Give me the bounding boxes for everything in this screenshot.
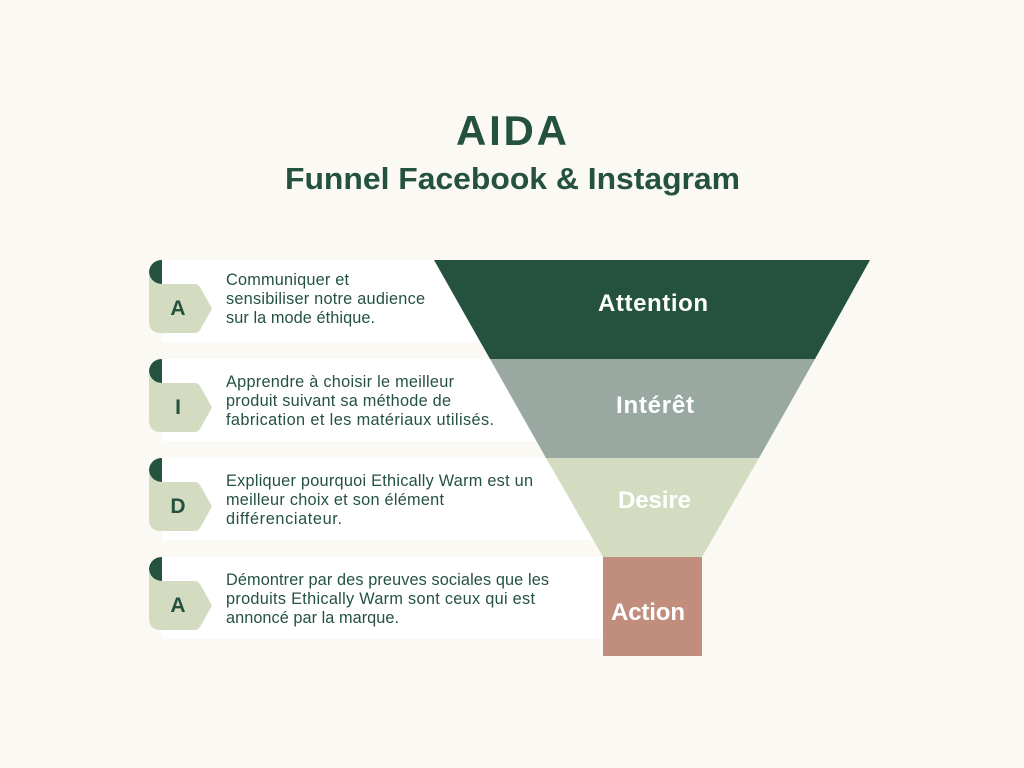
text: attention description: Communiquer et	[226, 271, 349, 289]
text: interest description: Apprendre à choisir le meilleur	[226, 373, 455, 391]
text: interest description: fabrication et les matériaux utilisés.	[226, 411, 494, 429]
icon: tag I	[149, 359, 212, 432]
funnel level: desire	[546, 458, 759, 557]
text: desire description: meilleur choix et son élément	[226, 491, 444, 509]
icon: tag A: A	[170, 297, 186, 320]
text: interest description: produit suivant sa méthode de	[226, 392, 451, 410]
funnel level: interest: Intérêt	[616, 392, 694, 419]
text: action description	[226, 571, 549, 627]
icon: tag D	[149, 458, 212, 531]
chart: funnel	[434, 260, 870, 656]
funnel level: interest	[490, 359, 815, 458]
title: AIDA	[456, 107, 567, 154]
text: action description: annoncé par la marque.	[226, 609, 399, 627]
icon: tag D: D	[170, 495, 186, 518]
panel: step I interest	[149, 359, 562, 441]
panel: step D desire	[149, 458, 612, 540]
funnel level: attention	[434, 260, 870, 359]
text: desire description: différenciateur.	[226, 510, 342, 528]
funnel level: action: Action	[611, 599, 685, 626]
icon: tag A	[149, 260, 212, 333]
funnel level: desire: Desire	[618, 487, 691, 514]
text: action description: produits Ethically Warm sont ceux qui est	[226, 590, 535, 608]
text: desire description: Expliquer pourquoi Ethically Warm est un	[226, 472, 533, 490]
icon: tag A: A	[170, 594, 186, 617]
text: attention description	[226, 271, 425, 327]
panel: step A action	[149, 557, 604, 639]
text: desire description	[226, 472, 533, 528]
funnel level: attention: Attention	[598, 290, 708, 317]
text: interest description	[226, 373, 494, 429]
panel: step A attention	[149, 260, 502, 342]
text: attention description: sensibiliser notre audience	[226, 290, 425, 308]
text: attention description: sur la mode éthique.	[226, 309, 375, 327]
title	[285, 107, 740, 196]
title: Funnel Facebook & Instagram	[285, 161, 740, 196]
text: action description: Démontrer par des preuves sociales que les	[226, 571, 549, 589]
icon: tag I: I	[175, 396, 181, 419]
icon: tag A	[149, 557, 212, 630]
funnel level: action	[603, 557, 702, 656]
